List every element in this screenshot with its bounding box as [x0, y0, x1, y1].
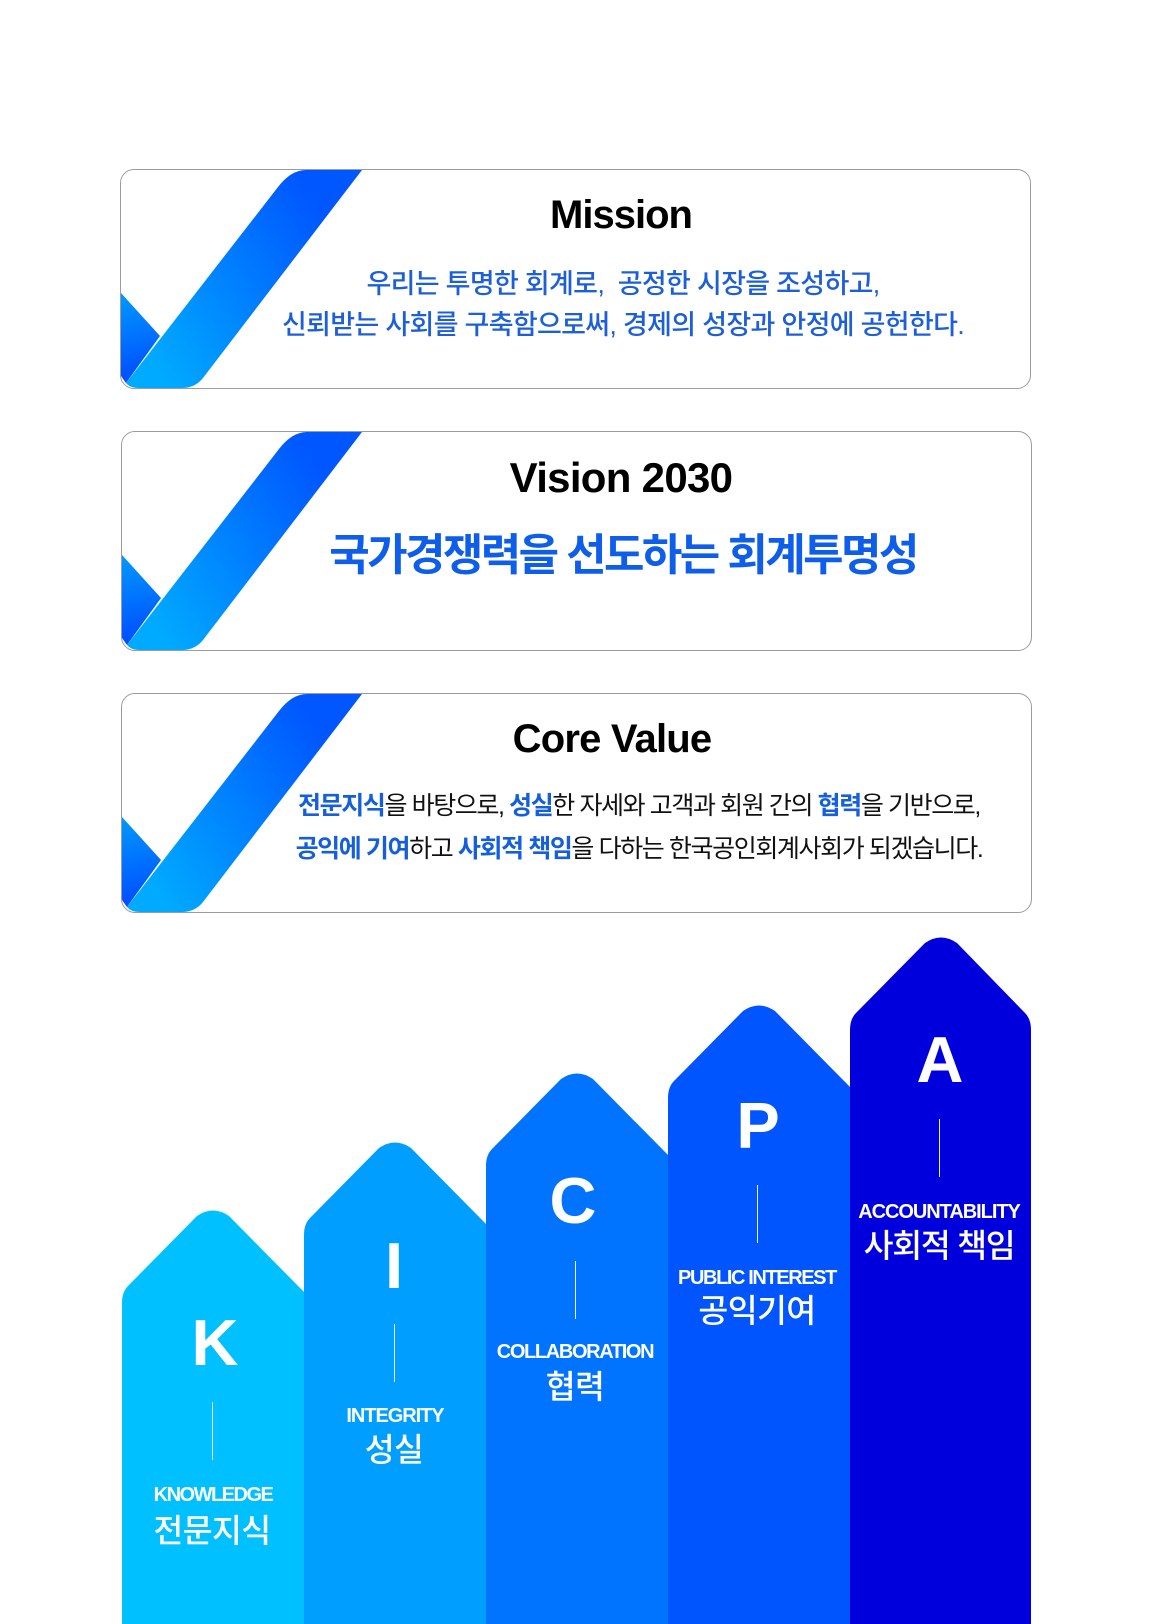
- divider I: [394, 1324, 395, 1382]
- label: 협력: 협력: [546, 1369, 604, 1405]
- label: PUBLIC INTEREST: PUBLIC INTEREST: [678, 1267, 836, 1289]
- text: core value line 1: 전문지식을 바탕으로, 성실한 자세와 고객과 회원 간의 협력을 기반으로,: [298, 792, 980, 820]
- heading: Core Value: Core Value: [513, 717, 711, 761]
- label: 사회적 책임: 사회적 책임: [864, 1228, 1014, 1264]
- label: 전문지식: 전문지식: [153, 1513, 271, 1549]
- panel: mission: [120, 169, 1031, 389]
- label: KNOWLEDGE: KNOWLEDGE: [154, 1484, 272, 1506]
- text: mission line 1: 우리는 투명한 회계로, 공정한 시장을 조성하고,: [366, 269, 880, 299]
- label: INTEGRITY: INTEGRITY: [346, 1405, 444, 1427]
- divider C: [575, 1261, 576, 1319]
- icon: check mark: [122, 694, 362, 912]
- divider A: [939, 1119, 940, 1177]
- heading: Mission: Mission: [550, 193, 692, 237]
- column K: knowledge: [153, 1306, 274, 1549]
- label: ACCOUNTABILITY: ACCOUNTABILITY: [858, 1201, 1020, 1223]
- label: COLLABORATION: COLLABORATION: [497, 1341, 653, 1363]
- letter I: I: [385, 1229, 403, 1302]
- panel: core value: [121, 693, 1032, 913]
- text: mission line 2: 신뢰받는 사회를 구축함으로써, 경제의 성장과 안정에 공헌한다.: [282, 310, 964, 340]
- heading: Vision 2030: Vision 2030: [510, 454, 732, 501]
- divider P: [757, 1185, 758, 1243]
- column I: integrity: [346, 1229, 444, 1468]
- column A: accountability: [858, 1023, 1020, 1264]
- label: 성실: 성실: [365, 1432, 423, 1468]
- panel: vision 2030: [121, 431, 1032, 651]
- divider K: [212, 1402, 213, 1460]
- letter C: C: [550, 1164, 596, 1237]
- icon: check mark: [122, 432, 362, 650]
- text: vision statement: 국가경쟁력을 선도하는 회계투명성: [329, 531, 917, 580]
- icon: check mark: [121, 170, 362, 388]
- letter K: K: [192, 1306, 238, 1379]
- label: 공익기여: 공익기여: [698, 1293, 816, 1329]
- text: core value line 2: 공익에 기여하고 사회적 책임을 다하는 한국공인회계사회가 되겠습니다.: [296, 835, 982, 863]
- column C: collaboration: [497, 1164, 654, 1405]
- column P: public interest: [678, 1089, 838, 1329]
- letter A: A: [917, 1023, 963, 1096]
- letter P: P: [736, 1089, 780, 1162]
